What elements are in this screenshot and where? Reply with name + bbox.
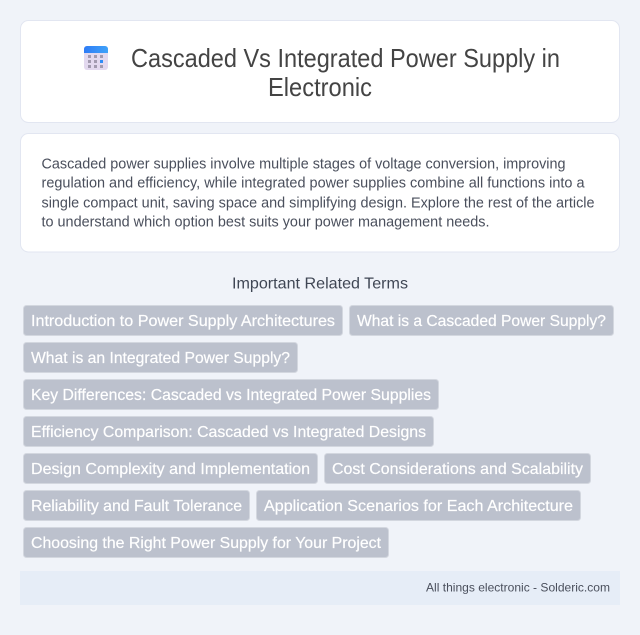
panel: summary — [20, 134, 620, 252]
tag: Reliability and Fault Tolerance — [31, 498, 242, 515]
tag: Design Complexity and Implementation — [31, 461, 310, 478]
title: Electronic — [268, 74, 372, 102]
text block: summary paragraph: single compact unit, saving space and simplifying design. Explore the rest of the article — [42, 195, 594, 211]
tag: Cost Considerations and Scalability — [332, 461, 583, 478]
text block: summary paragraph: to understand which option best suits your power management needs. — [42, 214, 489, 230]
tag — [324, 454, 590, 484]
title: Cascaded Vs Integrated Power Supply in — [131, 45, 560, 73]
footer text: All things electronic - Solderic.com — [426, 581, 610, 595]
panel: title card — [20, 20, 620, 122]
tag — [24, 416, 434, 446]
tag — [350, 306, 614, 336]
tag — [24, 380, 438, 410]
text block: summary paragraph: Cascaded power supplies involve multiple stages of voltage conversion, improving — [42, 156, 566, 172]
tag: Application Scenarios for Each Architecture — [264, 498, 573, 515]
tag — [256, 490, 580, 520]
tag: Choosing the Right Power Supply for Your Project — [31, 535, 382, 552]
tag: What is an Integrated Power Supply? — [31, 350, 290, 367]
tag: Introduction to Power Supply Architectures — [31, 313, 335, 330]
tag: What is a Cascaded Power Supply? — [357, 313, 606, 330]
footer — [20, 571, 620, 605]
tag — [24, 454, 318, 484]
panel: term tags — [24, 306, 614, 558]
tag — [24, 342, 298, 372]
tag — [24, 490, 250, 520]
tag — [24, 306, 342, 336]
icon: calendar — [84, 46, 108, 70]
tag: Key Differences: Cascaded vs Integrated Power Supplies — [31, 387, 431, 404]
tag — [24, 528, 388, 558]
tag: Efficiency Comparison: Cascaded vs Integrated Designs — [31, 424, 426, 441]
heading: related terms: Important Related Terms — [232, 275, 408, 292]
text block: summary paragraph: regulation and efficiency, while integrated power supplies combine all functions into a — [42, 175, 584, 191]
